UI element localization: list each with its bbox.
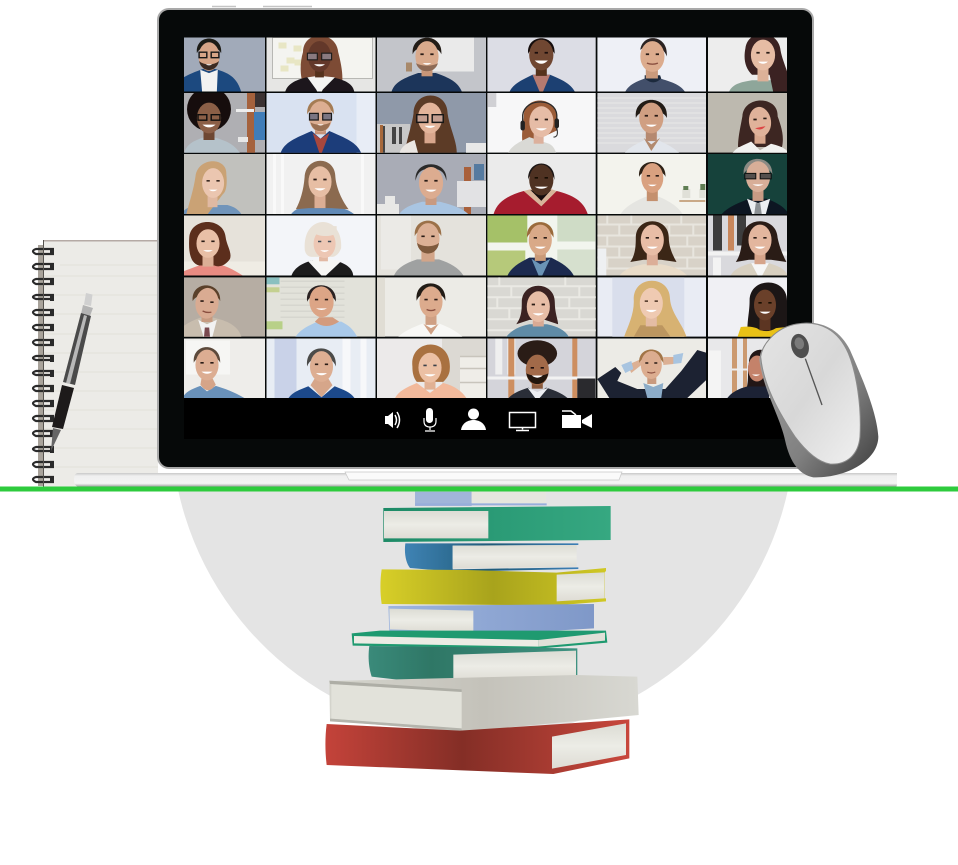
video call grid [181, 34, 791, 402]
tile: woman with binders behind [708, 216, 787, 276]
tile: smiling woman in blue top [266, 154, 376, 214]
tile: man with hands behind his head [597, 338, 706, 398]
tile: blonde woman with long hair [597, 277, 706, 337]
tile: woman with headset [487, 93, 596, 153]
tile: grey-haired man in suit on green [708, 154, 787, 214]
tile: blonde woman in black blazer [266, 216, 376, 276]
tile: woman in yellow top [708, 277, 787, 337]
tile: man with afro and glasses [184, 93, 265, 153]
tile: woman in denim shirt by brick wall [487, 277, 596, 337]
tile: woman with dark curls [708, 93, 787, 153]
tile: man with curly hair and shelves [487, 338, 596, 398]
tile: woman with auburn bob in coral top [184, 216, 265, 276]
tile: blonde woman [184, 154, 265, 214]
book: green [383, 506, 611, 542]
tile: smiling man in blue jacket [487, 38, 596, 92]
tile: man in white shirt [597, 154, 706, 214]
book: large white [329, 675, 639, 732]
tile: man in light blue t-shirt [266, 277, 376, 337]
laptop base [74, 472, 897, 488]
tile: man in beige blazer [184, 277, 265, 337]
notebook [33, 240, 158, 487]
green shelf line [0, 486, 958, 492]
tile: smiling man in light blue shirt [377, 154, 486, 214]
tile: woman by brick wall [597, 216, 706, 276]
tile: woman in sage top [708, 38, 787, 92]
toolbar icons [385, 408, 592, 431]
pen [51, 293, 93, 451]
tile: man in navy v-neck [266, 338, 376, 398]
tile: man in red polo [487, 154, 596, 214]
book: blue [405, 543, 578, 572]
stack of books [325, 492, 639, 774]
spiral binding [33, 248, 54, 483]
tile: woman with glasses and whiteboard [266, 38, 376, 92]
laptop side buttons [212, 6, 312, 8]
grey circle backdrop [178, 491, 788, 736]
tile: woman with glasses and shelf [377, 93, 486, 153]
icon: speaker [385, 412, 400, 428]
icon: microphone [424, 408, 436, 431]
icon: participant [461, 408, 486, 430]
tile: man with dark hair, blinds behind [597, 93, 706, 153]
book: thin green [352, 631, 607, 649]
tile: man in blue t-shirt [184, 338, 265, 398]
tile: smiling woman in peach blouse [377, 338, 486, 398]
book: teal [369, 646, 577, 686]
tile: man in front of green window [487, 216, 596, 276]
book: red [325, 719, 629, 774]
book: top blue [415, 492, 547, 506]
icon: video camera [562, 411, 592, 428]
laptop screen frame [158, 9, 813, 468]
toolbar strip [184, 398, 787, 439]
tile: man in navy shirt [377, 38, 486, 92]
book: light blue [388, 604, 594, 635]
icon: monitor [510, 412, 536, 430]
tile: man in white polo [377, 277, 486, 337]
book: yellow [380, 568, 606, 605]
tile: woman partly hidden by mouse [708, 338, 770, 398]
tile: man in dark sweater [597, 38, 706, 92]
tile: man in blue blazer [184, 38, 265, 92]
tile: man in navy blazer and glasses [266, 93, 376, 153]
tile: bearded man in grey t-shirt [377, 216, 486, 276]
computer mouse [759, 323, 878, 477]
